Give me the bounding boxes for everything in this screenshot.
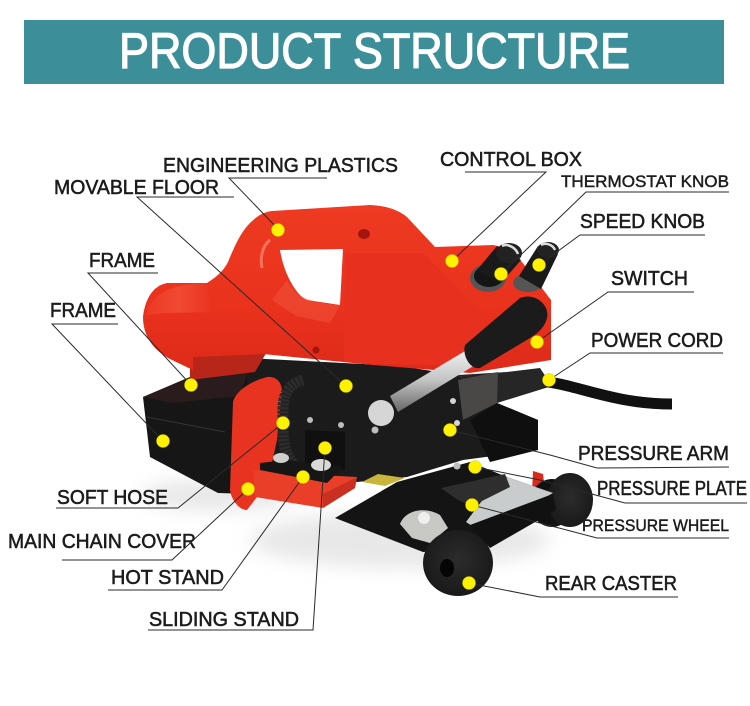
lever handle xyxy=(368,296,547,426)
label: soft hose: SOFT HOSE xyxy=(57,487,168,509)
dark underside of body xyxy=(190,345,268,380)
screws xyxy=(273,453,289,463)
welding machine illustration xyxy=(140,205,672,596)
front caster roller xyxy=(423,495,556,596)
label: control box xyxy=(440,149,582,268)
handle hole xyxy=(358,229,370,239)
label: pressure wheel xyxy=(466,498,729,538)
label: frame lower: FRAME xyxy=(50,300,116,322)
label: power cord xyxy=(542,330,723,386)
label: engineering plastics: ENGINEERING PLASTICS xyxy=(163,155,398,177)
title banner: PRODUCT STRUCTURE xyxy=(119,23,630,79)
label: main chain cover xyxy=(8,482,254,560)
label: pressure arm xyxy=(444,424,729,468)
ground shadow xyxy=(250,512,550,568)
label: sliding stand xyxy=(148,442,332,631)
label: pressure plate xyxy=(468,460,747,503)
label: frame lower xyxy=(50,300,170,448)
nozzle highlight xyxy=(146,283,212,315)
red body xyxy=(143,205,551,373)
label: main chain cover: MAIN CHAIN COVER xyxy=(8,531,196,553)
central black block xyxy=(247,358,538,482)
body side panel xyxy=(344,253,484,366)
power cord xyxy=(538,381,672,404)
lower platform xyxy=(335,462,556,552)
label: soft hose xyxy=(56,416,290,509)
label: hot stand: HOT STAND xyxy=(111,567,224,589)
label: thermostat knob: THERMOSTAT KNOB xyxy=(561,172,729,191)
control knobs xyxy=(470,242,559,292)
label: power cord: POWER CORD xyxy=(591,330,723,352)
label: frame upper xyxy=(88,250,198,392)
label: thermostat knob xyxy=(494,172,729,280)
label: movable floor xyxy=(54,177,352,392)
label: engineering plastics xyxy=(163,155,398,236)
band below handle hole xyxy=(272,280,340,323)
label: pressure wheel: PRESSURE WHEEL xyxy=(582,516,729,535)
label: hot stand xyxy=(108,470,310,590)
label: speed knob xyxy=(532,211,705,272)
red foot xyxy=(253,470,357,508)
label: rear caster: REAR CASTER xyxy=(545,573,677,595)
label: switch xyxy=(530,268,694,348)
label: rear caster xyxy=(462,573,678,597)
lower red cover xyxy=(230,377,282,510)
label: movable floor: MOVABLE FLOOR xyxy=(54,177,219,199)
rear caster roller xyxy=(530,471,593,527)
label: control box: CONTROL BOX xyxy=(440,149,582,171)
yellow strip under block xyxy=(362,474,405,486)
label: frame upper: FRAME xyxy=(89,250,155,272)
label: speed knob: SPEED KNOB xyxy=(580,211,705,233)
label: pressure arm: PRESSURE ARM xyxy=(578,443,729,465)
label: sliding stand: SLIDING STAND xyxy=(149,609,299,631)
label: switch: SWITCH xyxy=(611,268,688,290)
left black frame box xyxy=(143,365,250,494)
soft hose xyxy=(283,380,303,470)
